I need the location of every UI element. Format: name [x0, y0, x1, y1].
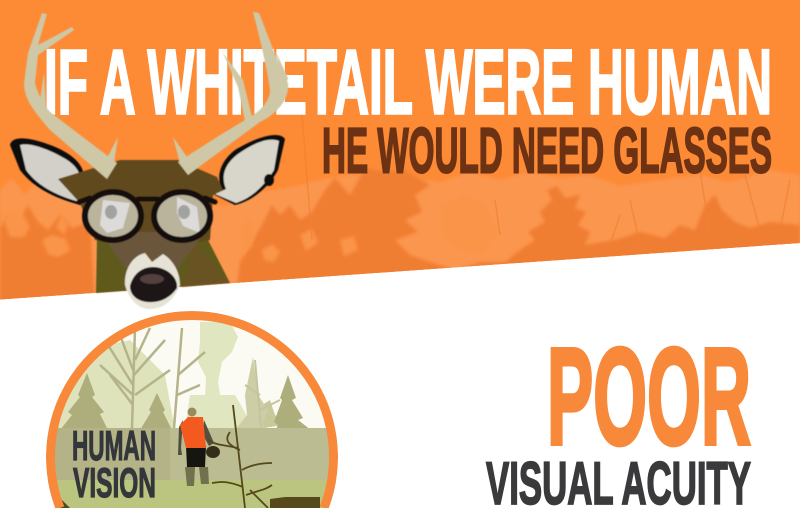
human vision circle: [46, 311, 338, 508]
head: [58, 160, 223, 252]
deer with glasses: [10, 12, 288, 309]
pale background trees: [198, 322, 238, 395]
human vision label: HUMAN: [72, 422, 156, 469]
left antler: [24, 13, 118, 179]
muzzle: [100, 232, 205, 268]
right ear: [213, 135, 285, 205]
forest: pale tree layer: [0, 170, 800, 300]
left ear: [10, 138, 84, 206]
fallen branches: [208, 405, 272, 508]
bare trees: [100, 328, 205, 428]
tall firs: [274, 375, 308, 428]
orange ring: [51, 316, 334, 508]
header banner: [0, 0, 800, 310]
forest: dark tree silhouettes: [0, 168, 800, 310]
human vision label line 2: VISION: [73, 459, 156, 506]
mid-ground band: [50, 428, 175, 480]
ground: [46, 480, 338, 508]
nose: [125, 253, 180, 309]
hunter: [178, 408, 220, 486]
right antler: [173, 12, 288, 175]
neck: [96, 238, 230, 293]
forest: pale clearings: [4, 215, 358, 262]
forest: faint branches: [302, 115, 790, 245]
mid trees: [262, 400, 278, 428]
glasses: [79, 192, 215, 240]
